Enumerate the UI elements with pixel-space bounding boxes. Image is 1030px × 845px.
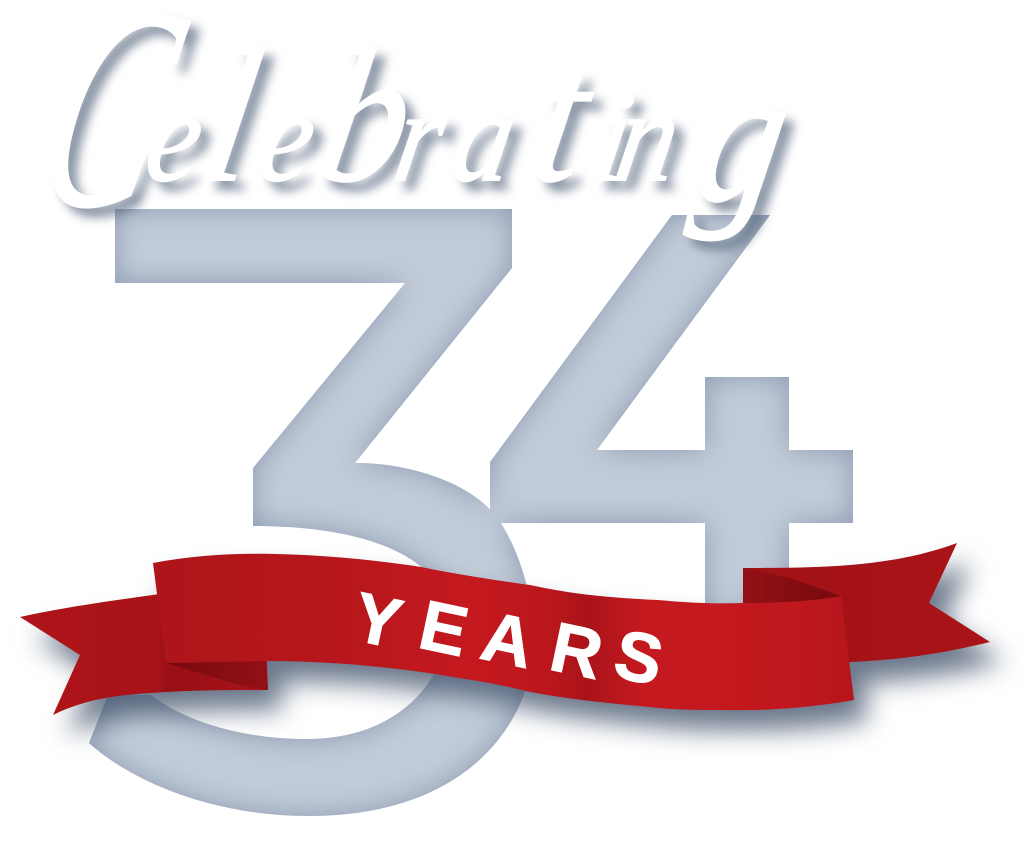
title script: Celebrating: g <box>682 32 804 242</box>
ribbon label: YEARS: A <box>475 596 541 683</box>
title script: Celebrating: n <box>607 64 691 208</box>
title script: Celebrating <box>12 0 808 268</box>
title script: Celebrating: l <box>190 12 275 222</box>
ribbon right fold <box>743 568 841 604</box>
title script: Celebrating: e <box>137 64 214 208</box>
numeral 34 <box>89 209 853 816</box>
digit 4 <box>490 215 853 620</box>
ribbon left fold <box>166 661 268 690</box>
title script: Celebrating: b <box>306 12 428 222</box>
ribbon main band <box>153 554 854 710</box>
digit 3 <box>89 209 533 816</box>
ribbon right tail <box>743 543 990 662</box>
title script: Celebrating: a <box>443 64 527 208</box>
ribbon label: YEARS <box>347 577 670 700</box>
title script: Celebrating: i <box>585 64 643 208</box>
ribbon label: YEARS: Y <box>347 577 409 663</box>
ribbon left tail <box>20 590 268 715</box>
ribbon label: YEARS: E <box>413 585 475 671</box>
title script: Celebrating: e <box>250 64 327 208</box>
ribbon label: YEARS: S <box>608 614 670 700</box>
ribbon banner <box>20 543 990 715</box>
title script: Celebrating: r <box>385 64 457 208</box>
ribbon label: YEARS: R <box>544 607 610 694</box>
title script: Celebrating: t <box>520 12 608 222</box>
